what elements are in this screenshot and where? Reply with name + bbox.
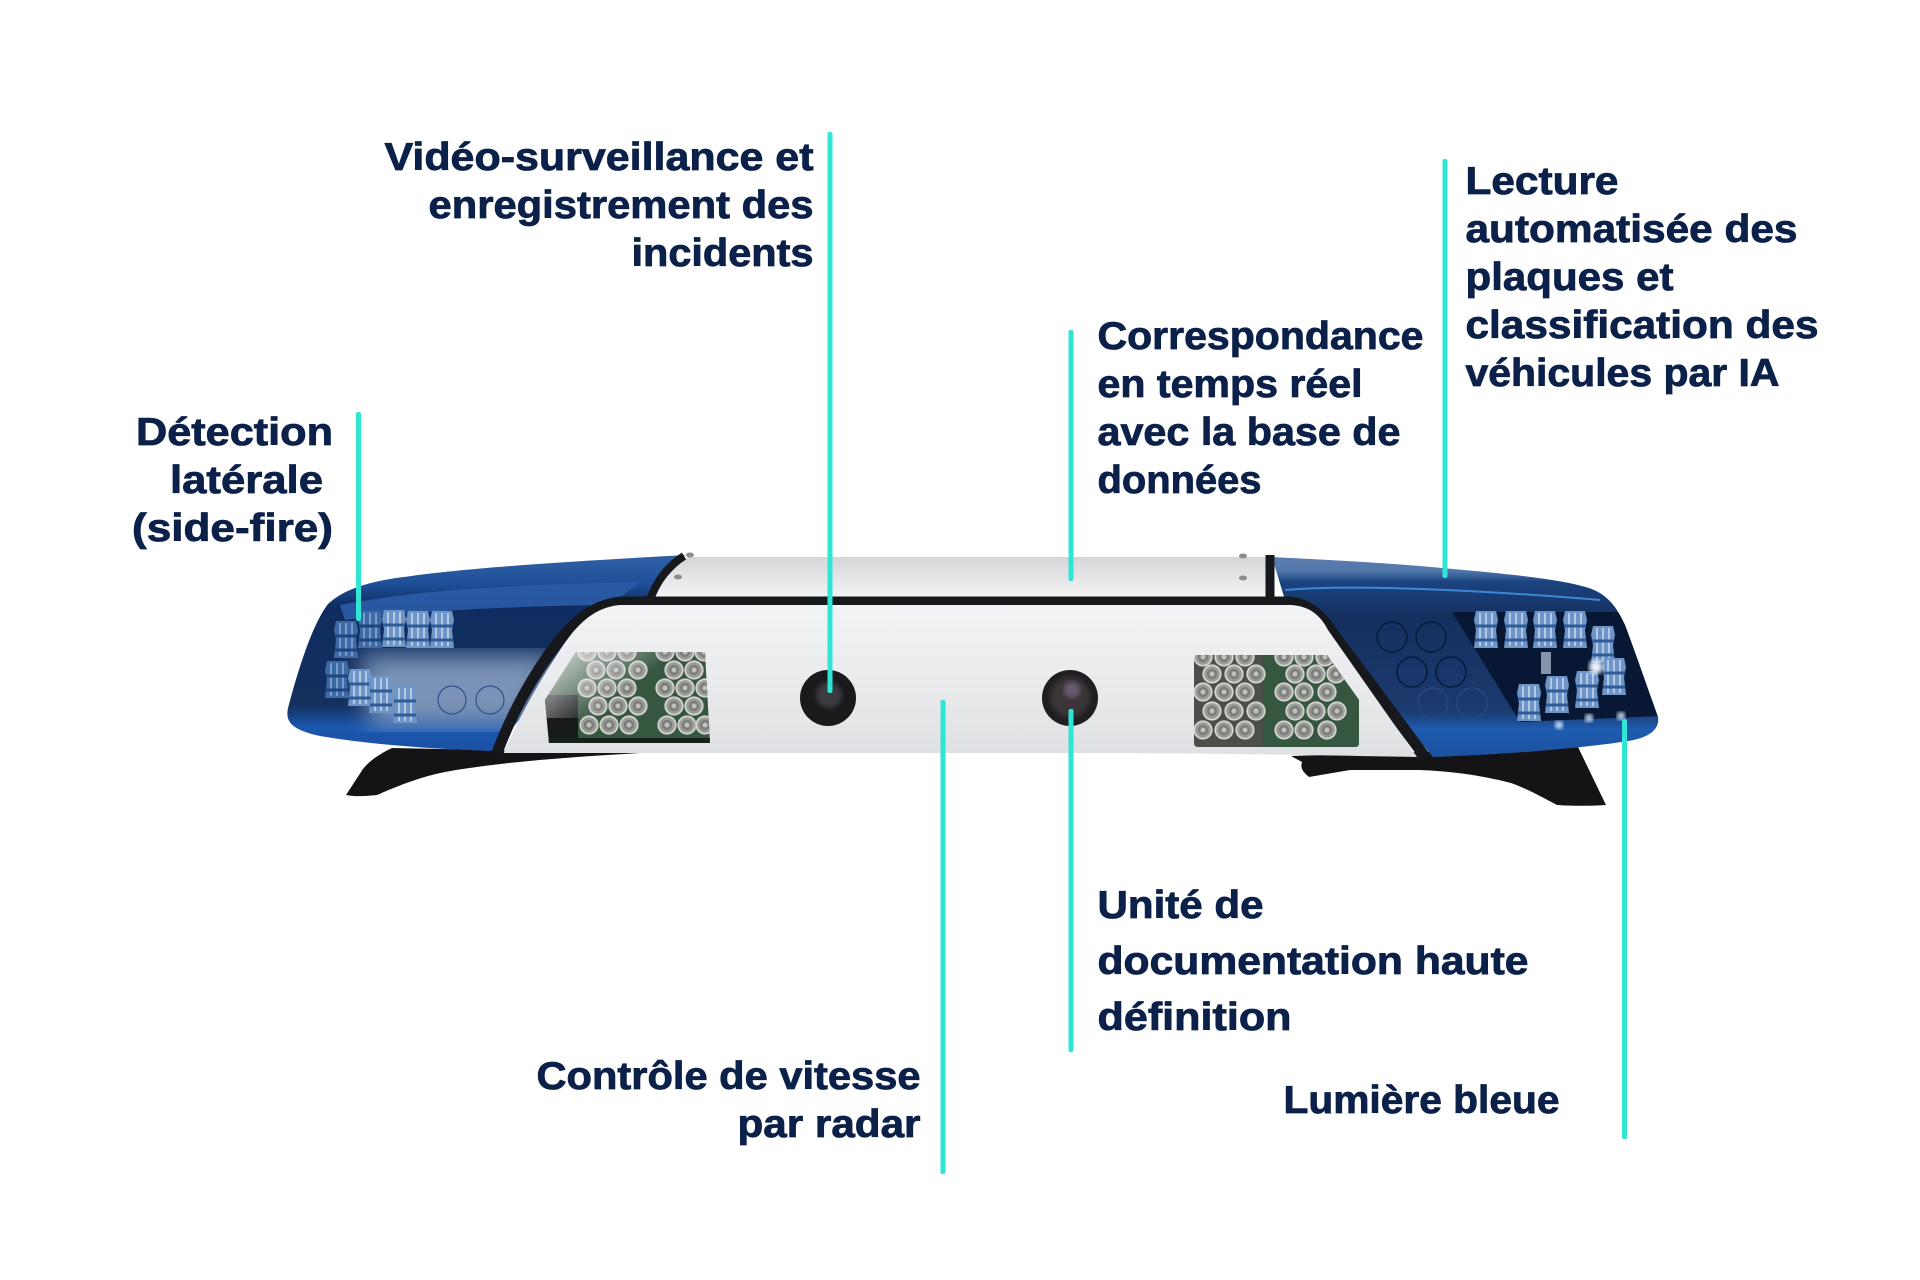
callout line: radar xyxy=(940,700,946,1174)
label: radar speed control: Contrôle de vitesse xyxy=(536,1055,920,1098)
left blue lens xyxy=(287,555,685,751)
callout line: HD documentation xyxy=(1068,709,1074,1052)
police light bar product xyxy=(270,540,1670,806)
black seals xyxy=(497,555,1426,758)
label: side-fire detection xyxy=(132,411,333,550)
label: side-fire detection: latérale xyxy=(170,459,323,502)
label: HD documentation: documentation haute xyxy=(1098,940,1528,983)
mounting screws xyxy=(674,552,1247,580)
label: video surveillance: incidents xyxy=(632,232,814,275)
label: radar speed control xyxy=(536,1055,920,1146)
label: blue light: Lumière bleue xyxy=(1284,1079,1560,1122)
label: plate reading: véhicules par IA xyxy=(1466,352,1780,395)
label: video surveillance: Vidéo-surveillance et xyxy=(384,136,814,179)
label: plate reading xyxy=(1466,160,1818,395)
label: side-fire detection: Détection xyxy=(136,411,333,454)
label: database matching: Correspondance xyxy=(1098,315,1424,358)
label: HD documentation xyxy=(1098,884,1528,1039)
left LED panel xyxy=(545,652,710,743)
main white housing xyxy=(504,605,1417,757)
right mounting foot xyxy=(1291,747,1606,806)
label: side-fire detection: (side-fire) xyxy=(132,507,333,550)
left mounting foot xyxy=(346,748,640,796)
label: video surveillance xyxy=(384,136,814,275)
callout line: blue light xyxy=(1622,719,1627,1139)
label: plate reading: plaques et xyxy=(1466,256,1674,299)
label: database matching: en temps réel xyxy=(1098,363,1362,406)
left camera xyxy=(800,670,856,726)
label: database matching: avec la base de xyxy=(1098,411,1400,454)
label: radar speed control: par radar xyxy=(738,1103,920,1146)
label: plate reading: classification des xyxy=(1466,304,1818,347)
right LED panel xyxy=(1194,655,1359,747)
right blue lens xyxy=(1274,557,1658,757)
callout line: plate reading xyxy=(1442,159,1448,578)
label: database matching xyxy=(1098,315,1424,502)
label: plate reading: Lecture xyxy=(1466,160,1618,203)
label: video surveillance: enregistrement des xyxy=(428,184,814,227)
callout line: database xyxy=(1068,330,1074,581)
callout line: side-fire xyxy=(356,412,361,621)
label: plate reading: automatisée des xyxy=(1466,208,1798,251)
callout line: video surveillance xyxy=(828,132,832,693)
right camera xyxy=(1042,670,1098,726)
label: HD documentation: Unité de xyxy=(1098,884,1264,927)
label: HD documentation: définition xyxy=(1098,996,1292,1039)
upper white housing xyxy=(649,557,1266,600)
label: database matching: données xyxy=(1098,459,1262,502)
